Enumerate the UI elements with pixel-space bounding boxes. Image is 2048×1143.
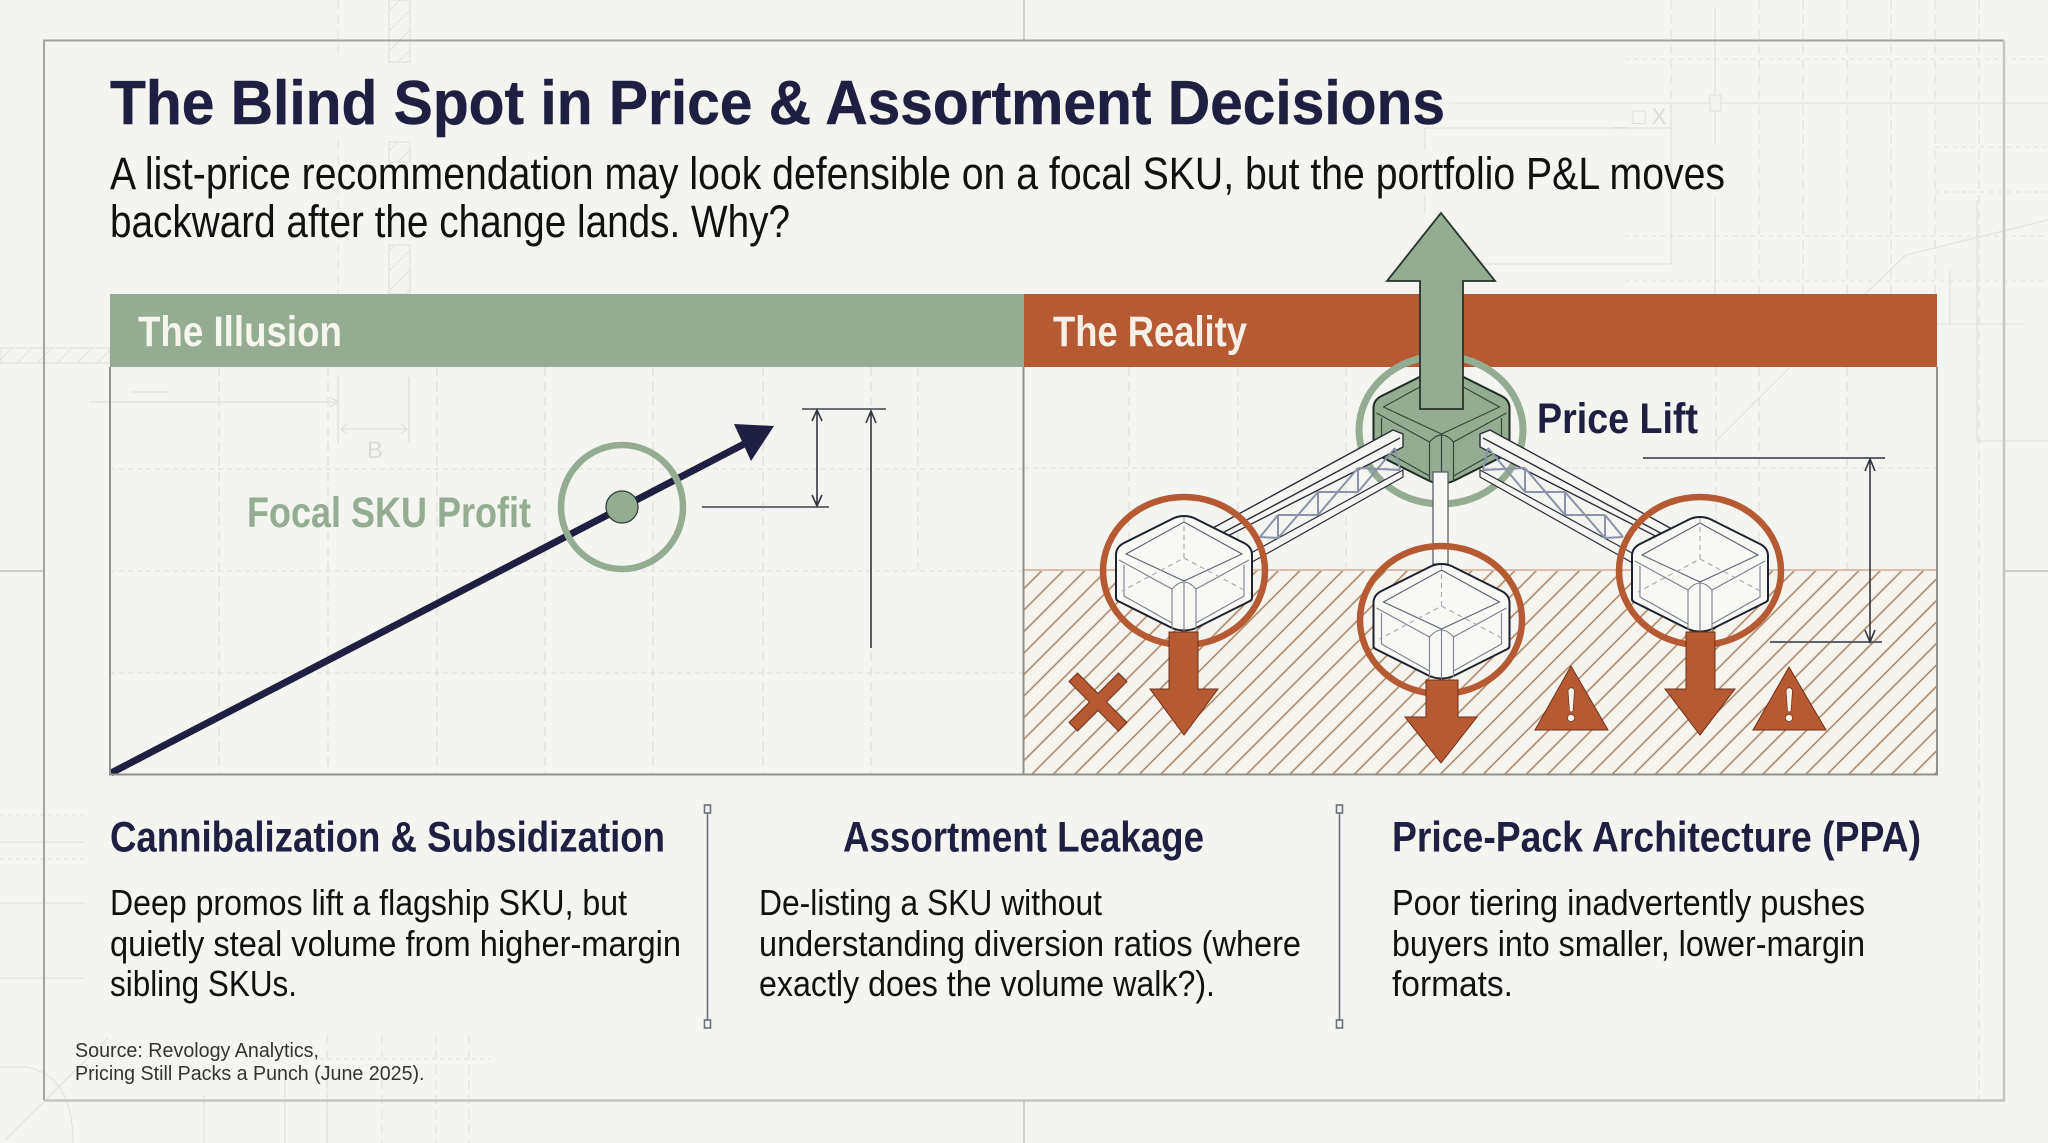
column: assortment leakage: Assortment Leakage <box>843 814 1204 862</box>
center sibling cube <box>1374 564 1510 680</box>
left truss <box>1200 430 1403 566</box>
source note <box>75 1040 424 1085</box>
title: The Blind Spot in Price & Assortment Decisions <box>110 69 1445 138</box>
icon: delist x mark <box>1049 653 1147 751</box>
focal SKU profit label: Focal SKU Profit <box>247 489 531 537</box>
column: price-pack architecture: Price-Pack Architecture (PPA) <box>1392 814 1921 862</box>
column: assortment leakage: De-listing a SKU without <box>759 882 1102 923</box>
price lift arrow <box>1387 213 1495 409</box>
icon: warning triangle center <box>1535 666 1608 730</box>
left down arrow <box>1150 632 1218 735</box>
right truss <box>1480 430 1683 566</box>
focal point ring and dot <box>561 445 683 569</box>
center ring <box>1359 356 1523 504</box>
column: price-pack architecture: buyers into smaller, lower-margin <box>1392 923 1865 964</box>
price lift label: Price Lift <box>1537 395 1698 443</box>
column: cannibalization and subsidization: Cannibalization & Subsidization <box>110 814 665 862</box>
source note: Pricing Still Packs a Punch (June 2025). <box>75 1063 424 1085</box>
illusion header band: The Illusion <box>138 308 342 356</box>
reality header band: The Reality <box>1053 308 1247 356</box>
lower-margin hatched zone <box>1024 570 1937 774</box>
dimension bracket <box>1643 458 1885 642</box>
right sibling cube <box>1632 517 1768 633</box>
panel outline <box>110 367 1937 774</box>
center down arrow <box>1405 680 1477 763</box>
column: price-pack architecture <box>1392 814 1921 1004</box>
faint dimension letter: B <box>367 437 383 464</box>
column: price-pack architecture: formats. <box>1392 963 1513 1004</box>
divider left <box>704 805 710 1028</box>
divider right <box>1336 805 1342 1028</box>
icon: warning triangle right <box>1753 667 1826 730</box>
column: cannibalization and subsidization: quietly steal volume from higher-margin <box>110 923 681 964</box>
reality header band <box>1024 294 1937 367</box>
illusion header band <box>110 294 1024 367</box>
column: assortment leakage <box>759 814 1301 1004</box>
right down arrow <box>1665 632 1735 735</box>
subtitle <box>110 148 1725 247</box>
column: cannibalization and subsidization <box>110 814 681 1004</box>
column: assortment leakage: exactly does the volume walk?). <box>759 963 1215 1004</box>
source note: Source: Revology Analytics, <box>75 1040 319 1062</box>
center strut <box>1433 472 1448 564</box>
focal SKU cube <box>1374 369 1510 485</box>
subtitle: backward after the change lands. Why? <box>110 196 790 247</box>
dimension lines <box>702 409 886 648</box>
window control glyphs: _ □ X <box>1613 104 1667 129</box>
column: assortment leakage: understanding diversion ratios (where <box>759 923 1301 964</box>
column: price-pack architecture: Poor tiering inadvertently pushes <box>1392 882 1865 923</box>
focal SKU profit trend arrow <box>111 424 774 773</box>
column: cannibalization and subsidization: Deep promos lift a flagship SKU, but <box>110 882 627 923</box>
subtitle: A list-price recommendation may look defensible on a focal SKU, but the portfolio P&L moves <box>110 148 1725 199</box>
left sibling cube <box>1116 516 1252 632</box>
sibling rings <box>1103 497 1781 694</box>
panel: the reality <box>1024 213 1937 774</box>
column: cannibalization and subsidization: sibling SKUs. <box>110 963 297 1004</box>
panel: the illusion <box>90 294 1024 775</box>
